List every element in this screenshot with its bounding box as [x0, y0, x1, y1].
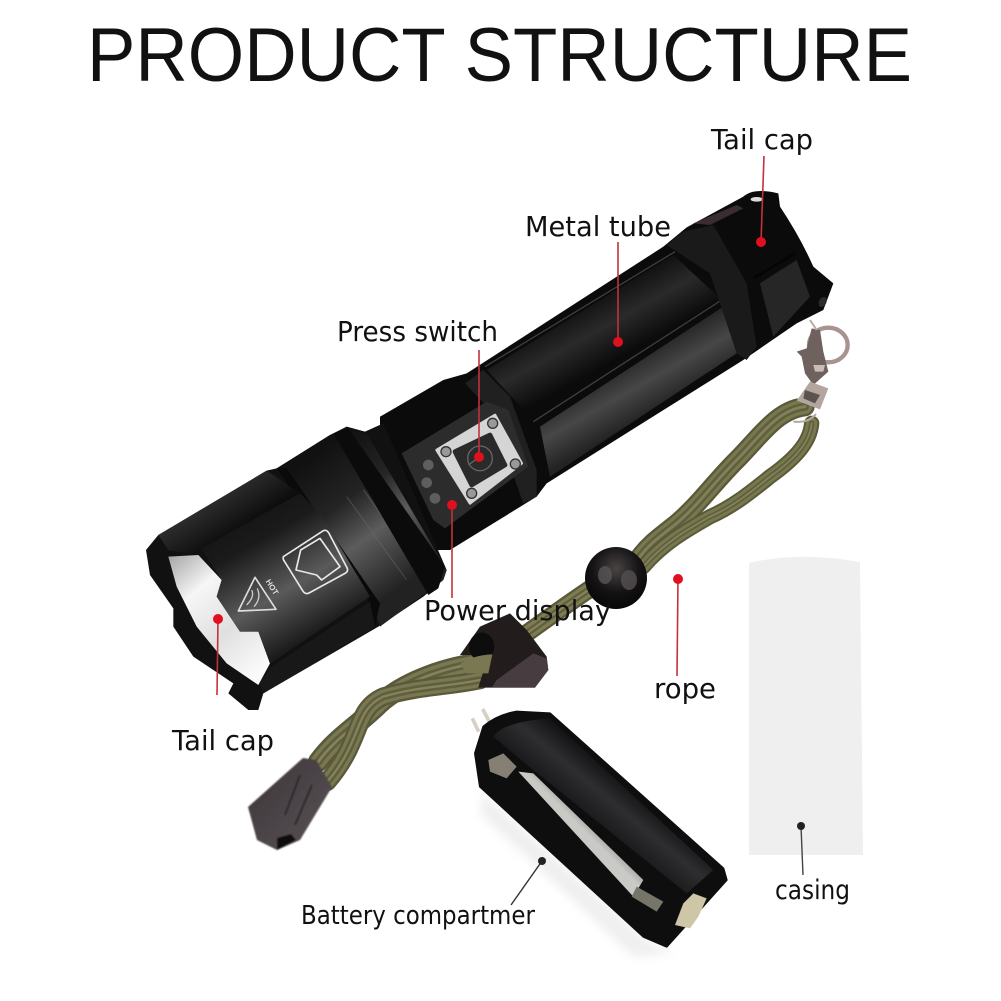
- mid ring: [465, 370, 537, 503]
- heat warning icon: [238, 577, 280, 611]
- casing sleeve: [749, 557, 863, 855]
- collar grooves: [347, 483, 423, 580]
- tube ridge highlight: [485, 252, 722, 422]
- flashlight head: [146, 423, 447, 710]
- tube lower facet: [540, 307, 737, 477]
- head middle facet: [202, 493, 370, 663]
- title: PRODUCT STRUCTURE: [87, 13, 912, 98]
- label: power display: [424, 500, 611, 627]
- rope stopper: [460, 613, 548, 688]
- rear black ring: [333, 428, 445, 595]
- label: casing: casing: [775, 875, 850, 906]
- lanyard hole: [751, 197, 763, 202]
- tube silhouette: [380, 191, 833, 550]
- carabiner clip: [793, 320, 848, 422]
- label: tail cap top: Tail cap: [710, 123, 813, 156]
- tube and tail section: [380, 191, 833, 550]
- head top facet: [158, 471, 300, 555]
- battery pins: [472, 709, 489, 732]
- head backing silhouette: [146, 423, 447, 710]
- label: tail cap bottom: [171, 614, 274, 757]
- battery upper wall: [493, 718, 713, 893]
- label: power display: Power display: [424, 594, 611, 627]
- battery level lights: [421, 460, 440, 504]
- label: press switch: Press switch: [337, 315, 498, 348]
- battery metal channel: [518, 772, 643, 897]
- tail reflection: [693, 205, 743, 225]
- tube upper facet: [487, 255, 722, 418]
- rope end cap: [248, 758, 332, 850]
- tail ring: [667, 225, 757, 360]
- strap rope upper loop: [640, 407, 812, 567]
- head lower facet: [259, 602, 375, 693]
- power button icon: [468, 446, 492, 471]
- label: tail cap bottom: Tail cap: [171, 724, 274, 757]
- battery contact: [675, 893, 707, 928]
- tail groove: [753, 253, 795, 278]
- battery compartment: [472, 709, 727, 957]
- battery shadow: [480, 793, 673, 957]
- black bead: [585, 547, 647, 609]
- label: metal tube: Metal tube: [525, 210, 671, 243]
- battery top contact: [488, 753, 517, 778]
- rope middle and twisted section: [318, 587, 593, 782]
- label: battery compartment: [301, 857, 549, 931]
- switch plate: [437, 415, 522, 503]
- front black ring: [277, 468, 380, 627]
- lens: [168, 555, 270, 685]
- heat warning icon: HOT: [264, 578, 280, 597]
- switch button housing: [455, 435, 505, 485]
- flashlight: [146, 191, 833, 710]
- label: press switch: [337, 315, 498, 462]
- collar: [277, 428, 447, 627]
- label: rope: rope: [654, 672, 716, 705]
- battery holder body: [475, 712, 727, 947]
- label: rope: [654, 574, 716, 705]
- label: casing: [775, 822, 850, 906]
- switch panel: [402, 402, 528, 528]
- label: tail cap top: [710, 123, 813, 247]
- arrow box icon: [283, 530, 348, 594]
- tail facet: [760, 260, 810, 337]
- plate screws: [441, 418, 520, 498]
- battery spring: [632, 887, 663, 912]
- label: metal tube: [525, 210, 671, 347]
